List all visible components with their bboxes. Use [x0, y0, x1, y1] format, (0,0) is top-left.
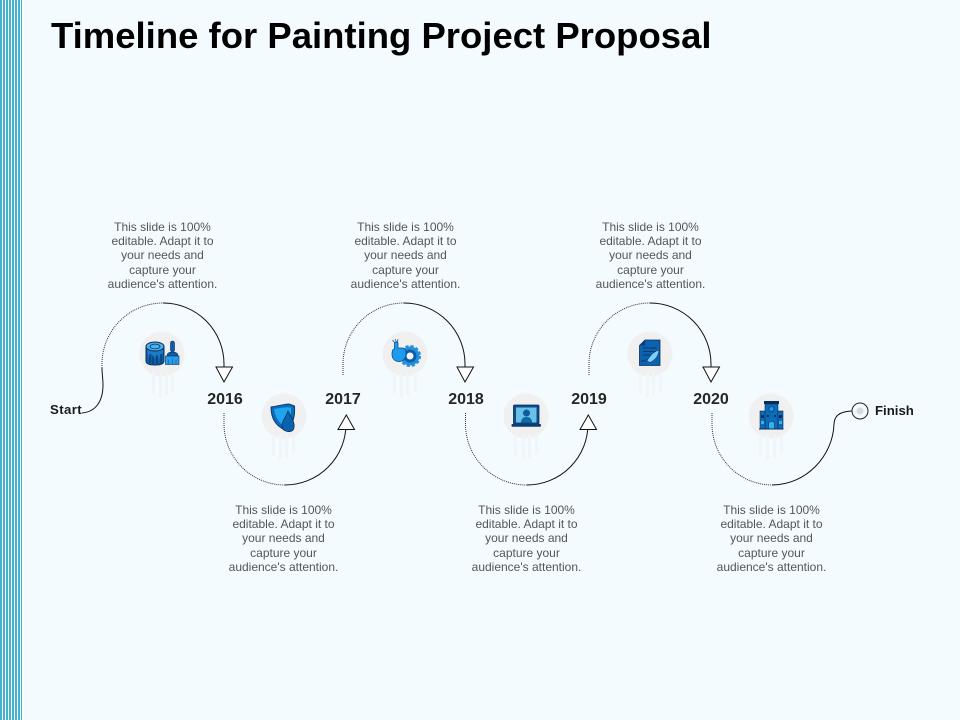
arrow 2019: [580, 415, 596, 430]
decorative striped band: [0, 0, 22, 720]
text block: 2016: This slide is 100%: [114, 220, 211, 234]
text block: finish: your needs and: [730, 531, 813, 545]
text block: finish: This slide is 100%: [723, 503, 820, 517]
text block: 2018: capture your: [372, 263, 439, 277]
text block: 2017: editable. Adapt it to: [232, 517, 335, 531]
text block: finish: audience's attention.: [717, 560, 826, 574]
text block: 2019: audience's attention.: [472, 560, 581, 574]
text block: 2020: audience's attention.: [596, 277, 705, 291]
icon: document with pen: [640, 340, 660, 366]
text block: 2018: your needs and: [364, 248, 447, 262]
text block: 2019: capture your: [493, 546, 560, 560]
label: finish: Finish: [875, 403, 914, 418]
text block: 2017: This slide is 100%: [235, 503, 332, 517]
finish node: [852, 403, 868, 419]
arrow 2018: [457, 367, 474, 382]
arc to 2019: [465, 413, 588, 485]
text block: 2017: capture your: [250, 546, 317, 560]
text block: 2016: audience's attention.: [108, 277, 217, 291]
icon: paint can and brush: [146, 341, 179, 365]
icon backdrop drips: finish: [748, 394, 794, 460]
year: 2019: 2019: [571, 391, 607, 408]
icon: laptop with person: [512, 405, 541, 427]
text block: 2016: editable. Adapt it to: [111, 234, 214, 248]
icon backdrop drips: 2018: [382, 332, 428, 398]
icon: building: [759, 401, 784, 430]
icon backdrop drips: 2019: [504, 394, 548, 460]
arrow 2017: [338, 415, 354, 430]
text block: 2018: audience's attention.: [351, 277, 460, 291]
text block: 2017: audience's attention.: [229, 560, 338, 574]
start connector: [82, 368, 103, 413]
text block: 2016: your needs and: [121, 248, 204, 262]
text block: 2018: This slide is 100%: [357, 220, 454, 234]
icon: shield and drop: [271, 404, 295, 432]
text block: finish: [717, 503, 826, 574]
text block: finish: editable. Adapt it to: [720, 517, 823, 531]
text block: 2016: [108, 220, 217, 291]
title: Timeline for Painting Project Proposal: [51, 15, 712, 56]
icon backdrop drips: 2016: [140, 332, 184, 398]
icon: hand and gear: [392, 339, 420, 366]
year: 2018: 2018: [448, 391, 484, 408]
arc to 2017: [224, 413, 346, 485]
text block: 2020: [596, 220, 705, 291]
arrow 2020: [703, 367, 720, 382]
text block: 2019: This slide is 100%: [478, 503, 575, 517]
text block: 2020: capture your: [617, 263, 684, 277]
text block: 2016: capture your: [129, 263, 196, 277]
year: 2020: 2020: [693, 391, 729, 408]
text block: 2020: editable. Adapt it to: [599, 234, 702, 248]
arc to finish: [712, 411, 852, 485]
text block: 2017: [229, 503, 338, 574]
icon backdrop drips: 2017: [262, 394, 306, 460]
year: 2016: 2016: [207, 391, 243, 408]
arc to 2018: [343, 303, 465, 375]
arc to 2020: [589, 303, 711, 375]
text block: 2020: This slide is 100%: [602, 220, 699, 234]
text block: 2018: editable. Adapt it to: [354, 234, 457, 248]
icon backdrop drips: 2020: [628, 332, 672, 398]
text block: 2017: your needs and: [242, 531, 325, 545]
text block: 2020: your needs and: [609, 248, 692, 262]
text block: finish: capture your: [738, 546, 805, 560]
text block: 2019: [472, 503, 581, 574]
text block: 2019: editable. Adapt it to: [475, 517, 578, 531]
arc to 2016: [102, 303, 224, 368]
label: start: Start: [50, 402, 82, 417]
text block: 2019: your needs and: [485, 531, 568, 545]
text block: 2018: [351, 220, 460, 291]
arrow 2016: [216, 367, 232, 382]
year: 2017: 2017: [325, 391, 361, 408]
